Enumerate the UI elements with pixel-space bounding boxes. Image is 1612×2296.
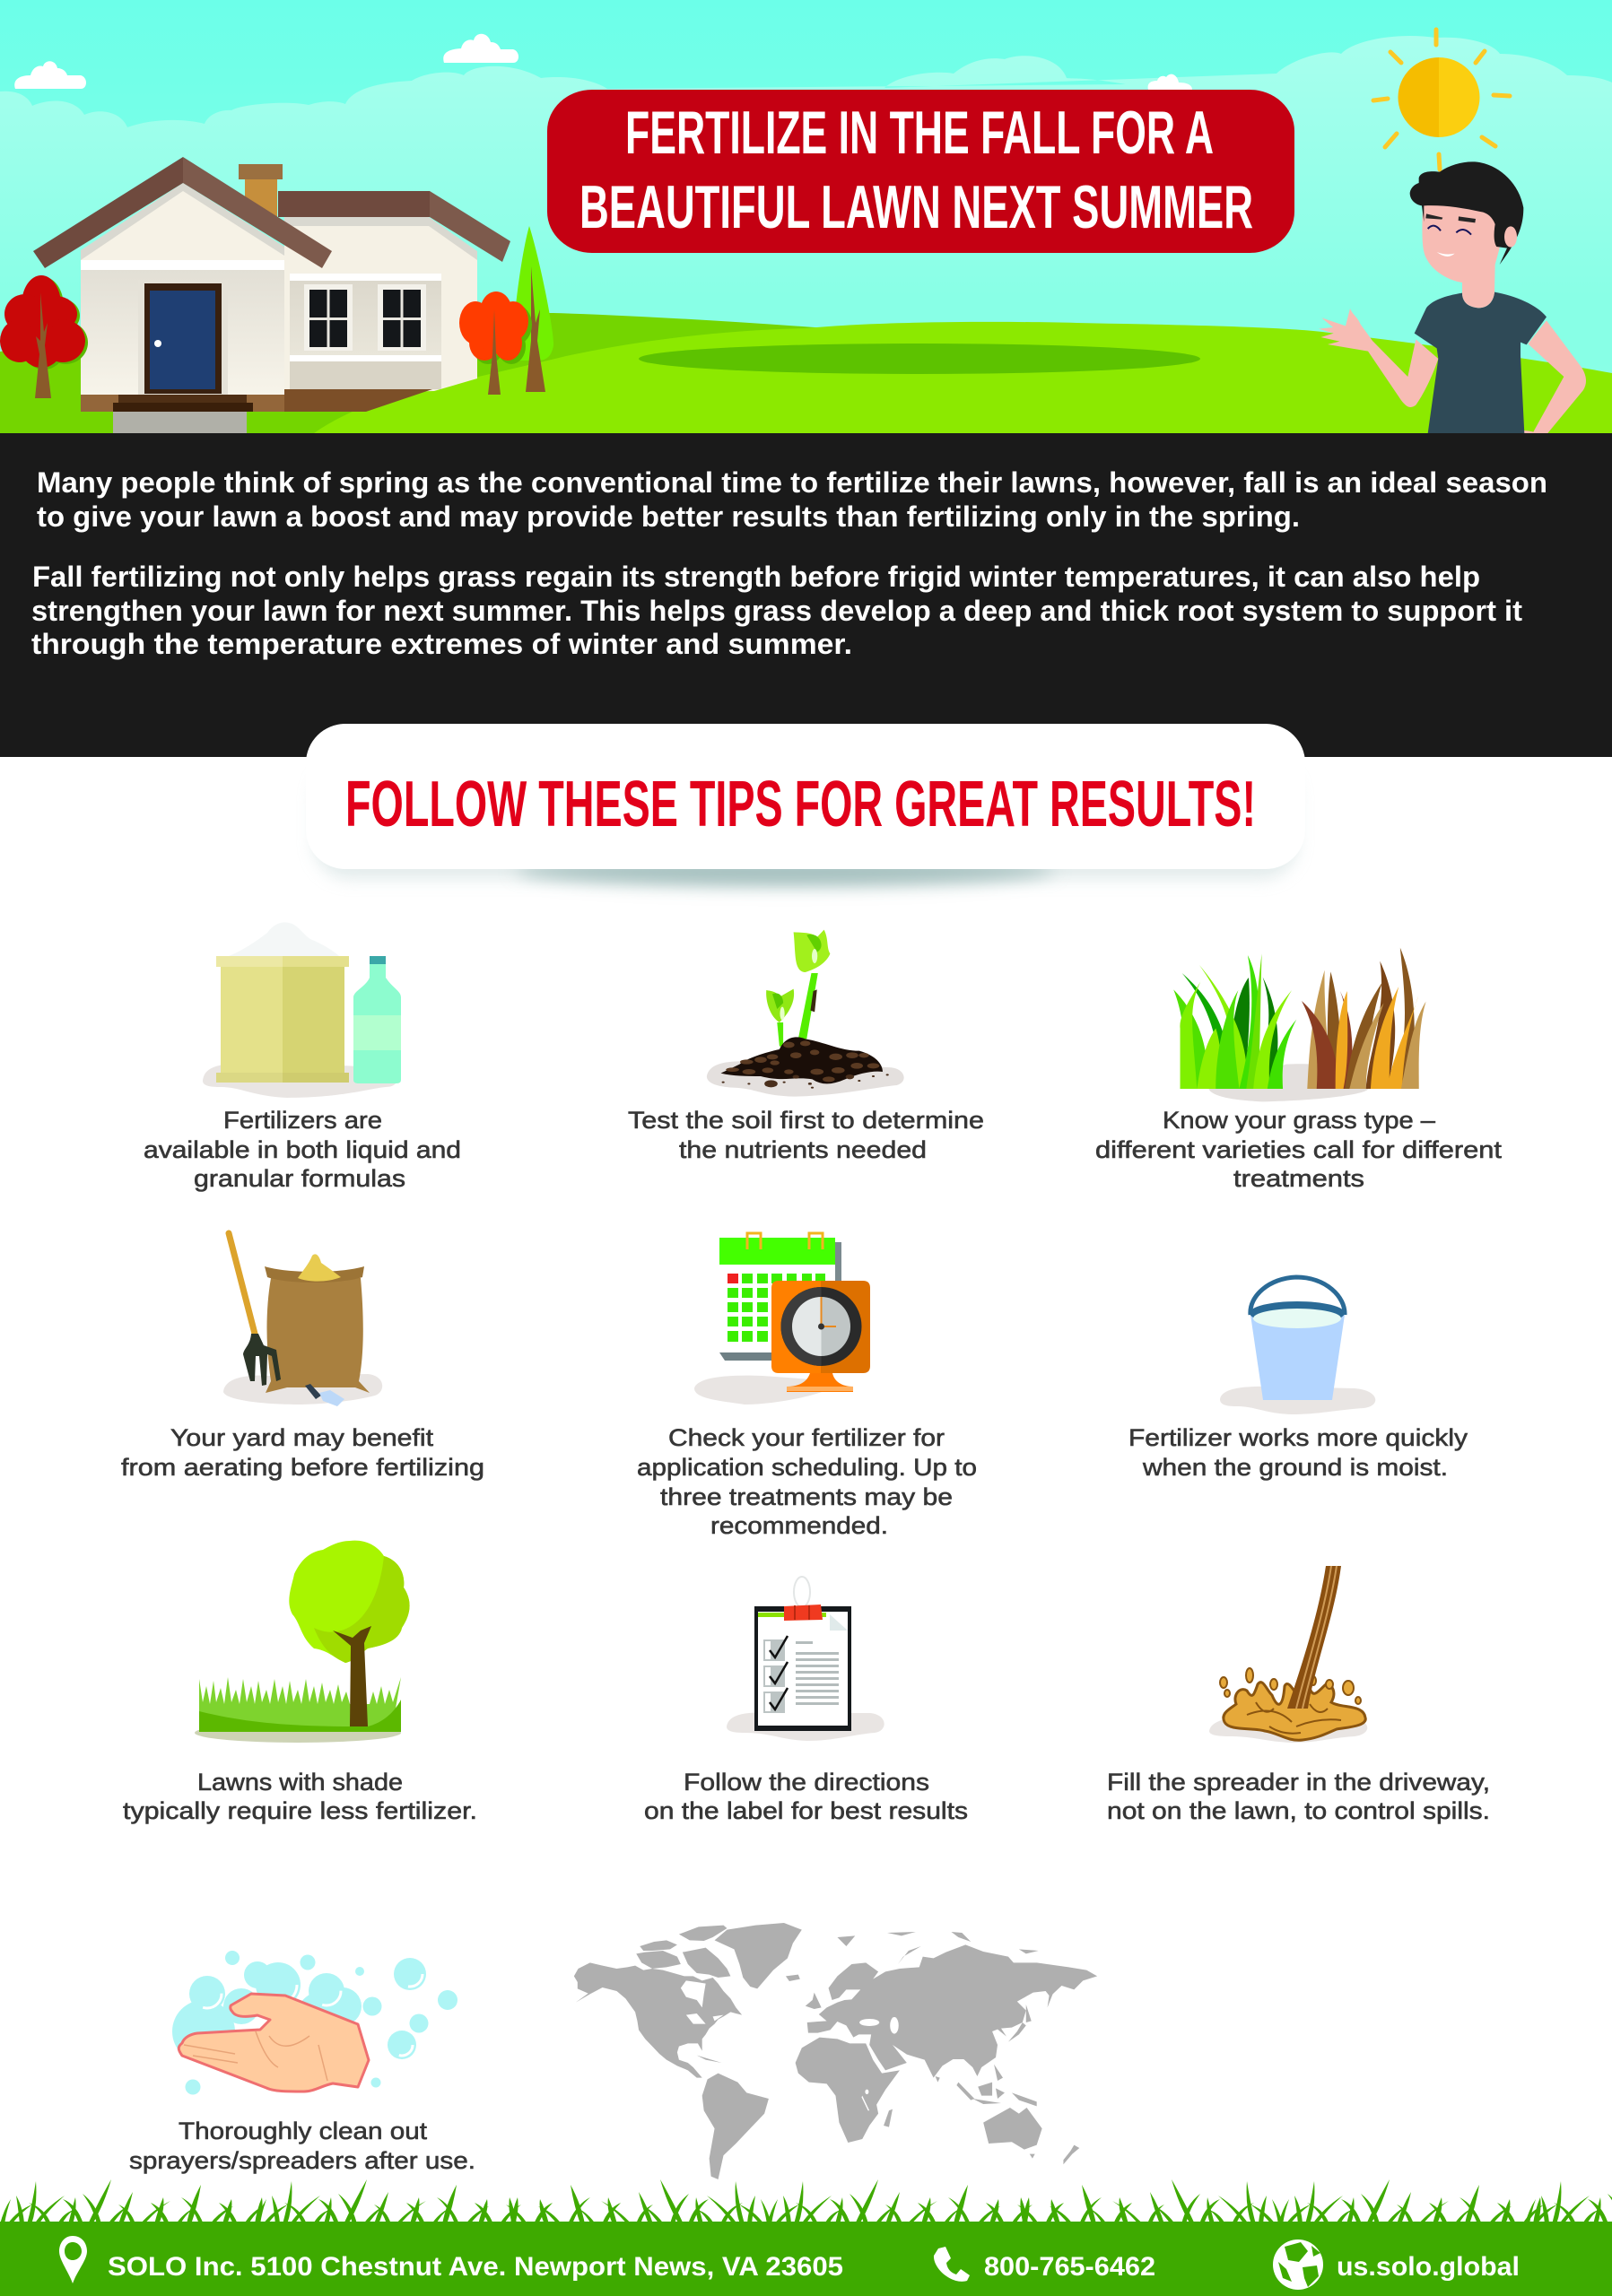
caption: available in both liquid and — [144, 1136, 461, 1163]
brown tuft — [1302, 948, 1426, 1089]
foundation — [81, 395, 284, 412]
house — [33, 157, 510, 433]
lawn — [199, 1677, 401, 1732]
neck and face — [1422, 204, 1500, 308]
caption — [1095, 1107, 1503, 1192]
title banner: BEAUTIFUL LAWN NEXT SUMMER — [579, 173, 1253, 241]
orange tree — [459, 291, 532, 395]
tip 8: clipboard — [644, 1577, 968, 1824]
caption: Fertilizers are — [223, 1107, 382, 1134]
caption: treatments — [1233, 1165, 1364, 1192]
icon: phone — [934, 2247, 970, 2282]
hair — [1410, 161, 1523, 265]
back hill — [0, 313, 1612, 433]
hill shadow — [639, 344, 1200, 374]
tip 2: seedling in soil — [628, 930, 984, 1163]
caption — [628, 1107, 984, 1163]
tips heading card — [306, 724, 1305, 884]
icon: globe — [1273, 2239, 1323, 2290]
caption — [144, 1107, 461, 1192]
bubbles — [172, 1951, 457, 2095]
right arm — [1528, 320, 1586, 433]
caption — [123, 1769, 477, 1824]
intro paragraph 2: strengthen your lawn for next summer. This helps grass develop a deep and thick root system to support it — [31, 595, 1522, 627]
tip 5: calendar and clock — [637, 1233, 977, 1539]
intro paragraph 1: to give your lawn a boost and may provide better results than fertilizing only in the spring. — [37, 500, 1300, 533]
roofs — [278, 191, 430, 217]
person — [1319, 161, 1586, 433]
background clouds — [0, 36, 1612, 359]
tip 3: green and brown grass — [1095, 948, 1503, 1192]
chimney — [245, 178, 277, 219]
caption: Follow the directions — [684, 1769, 929, 1796]
caption: granular formulas — [194, 1165, 405, 1192]
phone number: 800-765-6462 — [984, 2252, 1155, 2282]
caption — [644, 1769, 968, 1824]
address: SOLO Inc. 5100 Chestnut Ave. Newport News, VA 23605 — [108, 2252, 843, 2282]
caption: sprayers/spreaders after use. — [129, 2147, 475, 2174]
intro paragraph 2 — [31, 561, 1522, 660]
tip 4: sack and fork — [121, 1233, 484, 1481]
caption: the nutrients needed — [679, 1136, 927, 1163]
caption: typically require less fertilizer. — [123, 1797, 477, 1824]
caption: not on the lawn, to control spills. — [1107, 1797, 1490, 1824]
intro paragraph 1: Many people think of spring as the conventional time to fertilize their lawns, however, fall is an ideal season — [37, 466, 1547, 499]
footer grass — [0, 2179, 1612, 2224]
caption — [1107, 1769, 1490, 1824]
door — [138, 280, 228, 395]
caption: Know your grass type – — [1163, 1107, 1435, 1134]
caption: Fertilizer works more quickly — [1128, 1424, 1468, 1451]
cypress tree — [512, 226, 553, 392]
caption — [129, 2118, 475, 2174]
world map — [574, 1923, 1097, 2179]
calendar — [719, 1233, 841, 1361]
tip 6: bucket — [1128, 1277, 1468, 1481]
caption: Test the soil first to determine — [628, 1107, 984, 1134]
caption: from aerating before fertilizing — [121, 1454, 484, 1481]
left red tree — [0, 275, 88, 398]
caption: three treatments may be — [660, 1483, 953, 1510]
icon: location pin — [59, 2236, 87, 2283]
caption: Lawns with shade — [197, 1769, 403, 1796]
foliage — [289, 1541, 410, 1663]
caption: Fill the spreader in the driveway, — [1107, 1769, 1490, 1796]
caption: different varieties call for different — [1095, 1136, 1503, 1163]
caption: Thoroughly clean out — [179, 2118, 428, 2144]
left arm — [1319, 309, 1438, 407]
front hill — [314, 322, 1612, 433]
small white clouds — [14, 34, 1192, 90]
hand — [179, 1994, 369, 2092]
caption: recommended. — [710, 1512, 888, 1539]
tip 9: pouring fertilizer — [1107, 1566, 1490, 1824]
caption: when the ground is moist. — [1142, 1454, 1448, 1481]
caption: Your yard may benefit — [170, 1424, 434, 1451]
sun — [1373, 30, 1510, 170]
intro paragraph 2: Fall fertilizing not only helps grass regain its strength before frigid winter temperatures, it can also help — [32, 561, 1480, 593]
shirt — [1415, 292, 1547, 433]
green tuft — [1173, 953, 1296, 1089]
caption: application scheduling. Up to — [637, 1454, 977, 1481]
hero scene — [0, 0, 1612, 434]
tip 1: fertilizer box and bottle — [144, 922, 461, 1192]
caption: on the label for best results — [644, 1797, 968, 1824]
caption — [1128, 1424, 1468, 1481]
intro paragraph 2: through the temperature extremes of winter and summer. — [31, 628, 852, 660]
caption — [637, 1424, 977, 1539]
caption — [121, 1424, 484, 1481]
grass art — [1173, 948, 1426, 1101]
tip 7: tree and lawn — [123, 1541, 477, 1824]
splash — [1220, 1668, 1365, 1740]
windows — [304, 284, 353, 351]
tip 10: hand with soap bubbles — [129, 1951, 475, 2174]
caption: Check your fertilizer for — [668, 1424, 945, 1451]
clock — [771, 1281, 870, 1392]
website: us.solo.global — [1337, 2252, 1520, 2282]
stream — [1287, 1566, 1341, 1709]
intro band — [0, 433, 1612, 757]
seedling art — [707, 930, 904, 1097]
title banner: FERTILIZE IN THE FALL FOR A — [625, 99, 1214, 167]
title banner — [547, 90, 1294, 253]
intro paragraph 1 — [37, 466, 1547, 533]
footer — [0, 2179, 1612, 2296]
